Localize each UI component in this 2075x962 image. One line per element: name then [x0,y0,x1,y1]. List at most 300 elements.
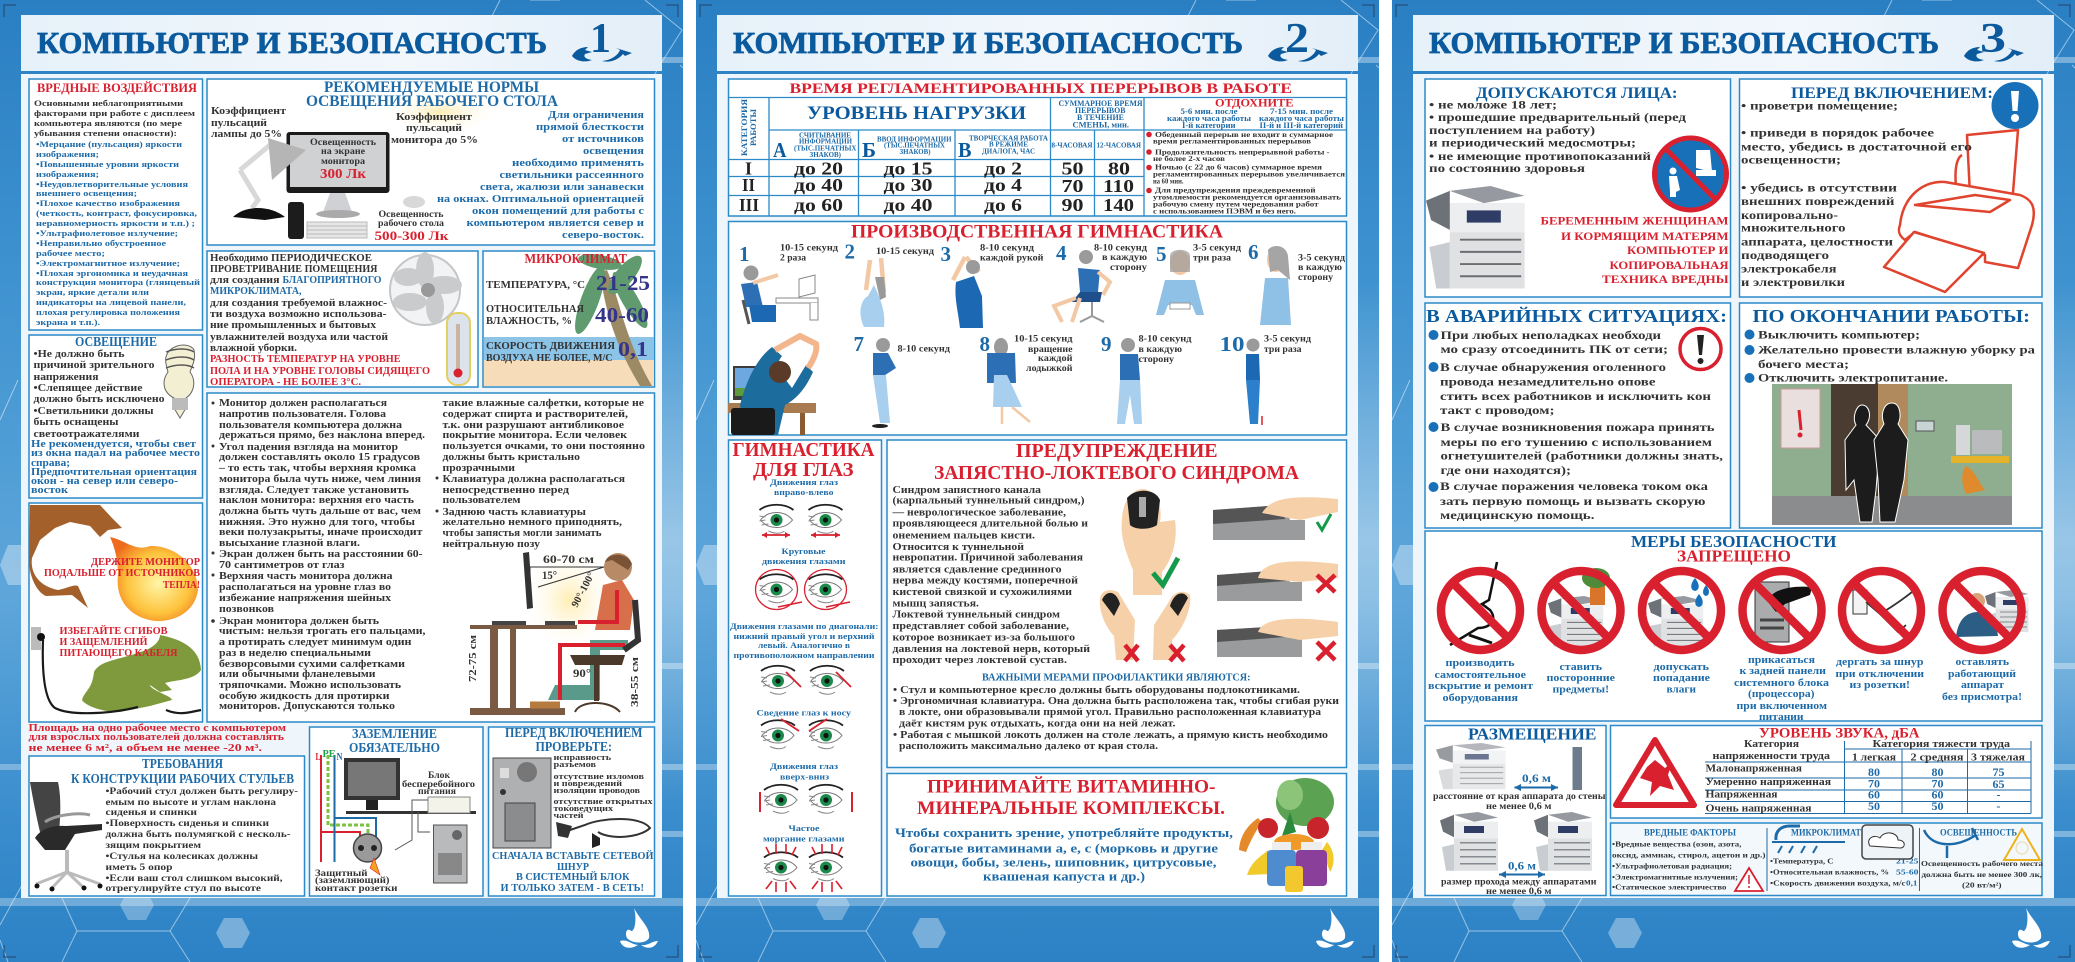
figure: woman stretching at a computer [728,336,816,435]
vitamin advice: овощи, бобы, зелень, шиповник, цитрусовые, [910,856,1216,870]
illustration: palm tree [569,251,653,386]
eye exercise captions: движения глазами [762,556,846,566]
monitor text: right column: желательно немного приподнять, [442,517,622,528]
exercise captions: 3-5 секунд [1264,334,1311,344]
exercise captions: 10-15 секунд [876,247,934,257]
checklist: исправность [554,753,612,762]
label: UPS: бесперебойного [402,779,475,790]
monitor text: left column: пользователя компьютера должна [219,420,403,431]
panel: emergencies [1425,303,1730,528]
warning: pregnant women [1540,214,1729,286]
list of factors: •Электромагнитное излучение; [36,258,180,268]
icon: red exclamation [1680,328,1721,370]
heading: check: ПРОВЕРЬТЕ: [536,740,612,755]
table rows: до 40 [794,175,843,195]
captions: prohibited actions: работающий [1948,668,2017,680]
icon: do not leave unattended [1942,571,2028,650]
microclimate values: 0,1 [618,337,648,361]
column: microclimate summary: 0,1 [1906,878,1918,888]
captions: prohibited actions: вскрытие и ремонт [1428,680,1534,692]
text: glare limitation: прямой блесткости [536,121,645,133]
heading: vitamins [917,776,1225,819]
sub-headers: load types: А [773,138,787,162]
exercise captions: каждой рукой [980,252,1044,264]
figure: exercise 8 [987,338,1030,424]
before switching on list: • приведи в порядок рабочее [1741,128,1934,140]
exercise captions: в каждую [1298,263,1342,273]
syndrome description: онемением пальцев кисти. [892,530,1035,542]
panel: end of work [1740,303,2042,528]
monitor text: left column: должен составлять около 15 градусов [219,452,420,463]
end of work actions: Выключить компьютер; [1758,330,1920,342]
exercise numbers: 5 [1156,242,1166,266]
table rows: до 6 [984,195,1022,215]
exercise captions: три раза [1264,345,1302,355]
syndrome description: проявляющееся длительной болью и [892,518,1088,530]
monitor text: left column: держаться прямо, без наклона вперед. [219,430,425,441]
labels: illumination on screen: монитора [321,157,365,167]
figure: exercise 2 [861,258,886,327]
diagram: grounding wiring [316,749,476,883]
checklist: токоведущих [554,804,613,813]
emergency actions: зать первую помощь и вызвать скорую [1440,496,1706,508]
temperature difference warning: ПОЛА И НА УРОВНЕ ГОЛОВЫ СИДЯЩЕГО [210,365,430,377]
monitor text: left column: раз в неделю специальными [219,648,371,659]
monitor text: left column: взгляда. Следует также установить [219,485,410,496]
column header: total break time: СУММАРНОЕ ВРЕМЯ [1058,99,1143,108]
emergency actions: огнетушителей (работники должны знать, [1440,450,1723,462]
labels: desk illumination [374,210,449,243]
poster 2 [696,0,1379,962]
notes with red bullets [1146,130,1345,216]
syndrome description: нерва между костями, поперечной [892,576,1078,586]
prevention measures: • Эргономичная клавиатура. Она должна быть расположена так, чтобы сгибая руки [893,696,1339,707]
captions: prohibited actions: посторонние [1546,672,1615,684]
labels: pulsation coefficients: пульсаций [211,117,268,129]
heading: chair requirements: ТРЕБОВАНИЯ [142,757,223,772]
instruction: ШНУР [557,861,589,873]
notes with red bullets: с использованием ПЭВМ и без него. [1153,206,1296,216]
warning: cable: ИЗБЕГАЙТЕ СГИБОВ [60,625,168,637]
icon row: eyes diagonal [761,666,851,694]
chair rules: емым по высоте и углам наклона [106,798,276,808]
column: illumination summary: (20 вт/м²) [1962,880,2002,890]
sub-headers: load types: СЧИТЫВАНИЕ [799,130,851,140]
list of factors: •Неправильно обустроенное [36,238,166,248]
table rows: 80 [1108,158,1130,178]
lighting recommendation: Предпочтительная ориентация [31,467,198,478]
text: glare limitation: светильники рассеянного [500,169,645,181]
column: microclimate summary: 55-60 [1896,868,1919,876]
illustration: leaving the office [1772,384,2012,525]
illustration: correct keyboard position [1213,497,1338,540]
text: area requirement: для взрослых пользователей должна составлять [28,732,284,743]
monitor text: left column: а протирать следует минимум один [219,637,412,648]
table rows: до 40 [884,195,932,215]
table: sound levels: напряженности труда [1712,751,1831,762]
before switching on list: и электровилки [1741,277,1845,289]
microclimate values: 21-25 [596,271,650,295]
sub-headers: load types: ДИАЛОГА, ЧАС [982,146,1035,156]
exercise numbers: 7 [854,332,864,356]
monitor text: left column: избежание напряжения шейных [219,593,392,604]
ventilation text: ПРОВЕТРИВАНИЕ ПОМЕЩЕНИЯ [210,263,378,275]
icon: no self repair [1441,562,1520,650]
checklist: отсутствие изломов [554,772,645,781]
heading: carpal tunnel: ЗАПЯСТНО-ЛОКТЕВОГО СИНДРОМА [934,463,1299,484]
table: sound levels: Очень напряженная [1706,804,1812,814]
figure: exercise 10 [1246,338,1262,425]
monitor text: right column [442,398,645,550]
heading: before switching on: ПЕРЕД ВКЛЮЧЕНИЕМ: [1791,85,1993,102]
diagram: grounding wiring: PE [322,749,336,760]
microclimate parameters: ВОЗДУХА НЕ БОЛЕЕ, М/С [486,352,613,364]
poster 3 background and header [1392,0,2075,962]
heading: vitamins: ПРИНИМАЙТЕ ВИТАМИННО- [927,776,1216,798]
checklist: отсутствие открытых [554,797,652,806]
panel: harmful effects [29,79,202,330]
warning: pregnant women: И КОРМЯЩИМ МАТЕРЯМ [1561,229,1728,243]
list of factors: внешнего освещения; [36,188,137,198]
column: microclimate summary: 21-25 [1896,856,1919,866]
heading: chair requirements [71,757,294,787]
panel: ventilation [207,251,478,388]
poster 3 number badge: 3 [1980,16,2006,62]
heading: sound level: УРОВЕНЬ ЗВУКА, дБА [1759,726,1920,742]
illustration: copier [1426,186,1525,288]
sub-headers: load types: 12-ЧАСОВАЯ [1096,140,1142,150]
end of work bullets [1744,330,1754,383]
panel: lighting [29,335,202,498]
column: microclimate summary: МИКРОКЛИМАТ [1791,828,1861,838]
monitor text: left column: напротив пользователя. Голова [219,409,387,420]
monitor text: left column: или обычными фланелевыми [219,669,376,680]
label: protective contact: (заземляющий) [315,875,390,886]
poster 3 [1392,0,2075,962]
sub-headers: load types [773,130,1142,162]
syndrome description: давления на локтевой нерв, который [892,644,1090,655]
icon row: eyes left-right [760,505,842,538]
illustration: copier near wall [1436,743,1506,789]
ventilation text: для создания [210,274,280,286]
syndrome description: Относится к туннельной [892,542,1024,553]
monitor text: left column: нижняя. Это нужно для того, чтобы [219,517,415,528]
allowed persons list: по состоянию здоровья [1429,163,1585,175]
instruction: В СИСТЕМНЫЙ БЛОК [516,871,630,883]
column: harmful factors: ВРЕДНЫЕ ФАКТОРЫ [1644,828,1736,838]
text: area requirement: Площадь на одно рабочее место с компьютером [28,723,286,734]
allowed persons list: поступлением на работу) [1429,125,1595,137]
monitor text: right column: пользуется очками, то они постоянно [442,441,645,452]
table: sound levels: 60 [1868,788,1880,802]
eye exercise captions [730,477,879,844]
captions: prohibited actions: предметы! [1552,684,1609,696]
illustration: ergonomic posture: 72-75 см [468,635,479,682]
emergency actions: В случае поражения человека током ока [1440,481,1708,493]
heading: carpal tunnel: ПРЕДУПРЕЖДЕНИЕ [1016,441,1218,462]
instruction [492,850,654,894]
column: microclimate summary: •Скорость движения воздуха, м/с [1770,878,1906,888]
column header: rest: 5-6 мин. после [1180,107,1238,116]
lighting rules [34,349,164,440]
before switching on list: • убедись в отсутствии [1741,182,1897,194]
column header: category: КАТЕГОРИЯ [739,99,749,156]
monitor text: left column: располагаться на уровне глаз во [219,582,391,593]
panel: before switching on check [488,726,654,896]
temperature difference warning [210,353,430,388]
icon: do not touch back panel [1742,571,1822,650]
table rows: до 20 [794,158,843,178]
allowed persons list: • не имеющие противопоказаний [1429,151,1651,163]
table: sound levels: Категория тяжести труда [1872,739,2011,750]
column: harmful factors: оксид, аммиак, стирол, ацетон и др.) [1612,850,1766,860]
label: UPS: питания [418,787,456,797]
illustration: wrong keyboard position 1 [1217,561,1338,601]
chair rules: зящим покрытием [106,841,202,851]
monitor text: left column: наклон монитора: верхняя его часть [219,495,414,506]
poster 1 [0,0,683,962]
ventilation text: увлажнителей воздуха или частой [210,331,389,343]
allowed persons list: • прошедшие предварительный (перед [1429,112,1686,124]
ventilation text: МИКРОКЛИМАТА, [210,285,302,297]
chair rules: иметь 5 опор [106,863,172,873]
labels: illumination on screen: 300 Лк [320,167,367,182]
sub-headers: load types: В РЕЖИМЕ [989,140,1028,148]
sub-headers: load types: ТВОРЧЕСКАЯ РАБОТА [969,134,1049,142]
ventilation text: Необходимо ПЕРИОДИЧЕСКОЕ [210,252,372,264]
monitor text: left column: 70 сантиметров от глаз [219,560,344,571]
notes with red bullets: не более 2-х часов [1153,154,1225,163]
table rows: 90 [1062,195,1084,215]
before switching on list: множительного [1741,222,1846,234]
list of factors: (четкость, контраст, фокусировка, [36,208,197,218]
column: microclimate summary: •Относительная влажность, % [1770,868,1889,876]
lighting rules: •Слепящее действие [34,383,143,394]
column header: rest: 7-15 мин. после [1270,107,1334,116]
heading: eye gymnastics [732,440,874,481]
poster 1 background and header [0,0,683,962]
table rows: III [739,195,759,215]
before switching on list: аппарата, целостности [1741,236,1893,248]
prevention measures: даёт кистям рук отдыхать, когда они на ней лежат. [899,718,1176,730]
exercise captions: 8-10 секунд [980,244,1034,254]
monitor text: right column: чтобы запястья могли занимать [442,528,602,539]
labels: illumination on screen: на экране [321,147,365,157]
eye exercise captions: нижний правый угол и верхний [734,631,875,641]
panel: eye gymnastics [728,440,882,896]
icon: fan [390,252,462,325]
captions: prohibited actions: без присмотра! [1942,691,2022,703]
warning: pregnant women: КОПИРОВАЛЬНАЯ [1610,258,1729,272]
exercise captions: 8-10 секунд [1094,244,1147,254]
monitor text: right column: прозрачными [442,463,515,474]
icon: prohibited for pregnant women [1654,138,1726,210]
panel: microclimate [483,251,654,387]
monitor text: left column [218,398,426,712]
emergency actions: меры по его тушению с использованием [1440,437,1712,449]
illustration: wrong keyboard position 2 [1217,619,1338,660]
syndrome description: которое возникает из-за большого [892,632,1075,644]
heading: harmful effects: ВРЕДНЫЕ ВОЗДЕЙСТВИЯ [37,80,198,95]
monitor text: left column: Экран монитора должен быть [219,616,379,627]
heading: microclimate: МИКРОКЛИМАТ [524,251,627,266]
icon: blue exclamation [1992,82,2038,129]
column header: total break time [1058,99,1143,130]
column header: rest: каждого часа работы [1167,114,1252,123]
panel: who is allowed [1425,79,1730,297]
exercise captions: 8-10 секунд [1138,334,1192,344]
eye exercise captions: Частое [788,823,820,833]
labels: pulsation coefficients: монитора до 5% [391,134,478,146]
intro text: Основными неблагоприятными [34,98,183,108]
temperature difference warning: ОПЕРАТОРА - НЕ БОЛЕЕ 3°С. [210,376,361,388]
sub-headers: load types: 8-ЧАСОВАЯ [1052,140,1093,150]
exercise numbers: 1 [739,242,750,266]
column header: total break time: В ТЕЧЕНИЕ [1077,113,1124,122]
icon: no liquids [1642,571,1721,650]
labels: pulsation coefficients: пульсаций [406,122,463,134]
heading: lighting norms [306,79,558,110]
list of factors: •Ультрафиолетовое излучение; [36,228,178,238]
caption: passage width: размер прохода между аппаратами [1441,878,1597,888]
emergency actions: где они находятся); [1440,465,1571,477]
table rows: 110 [1103,176,1134,196]
table rows: II [742,175,755,195]
illustration: wrong hand positions [1100,590,1190,661]
vitamin advice: Чтобы сохранить зрение, употребляйте продукты, [895,826,1233,840]
caption: passage width [1441,878,1597,897]
lighting recommendation: из окна падал на рабочее место [31,448,200,459]
syndrome description: Локтевой туннельный синдром [892,610,1060,620]
label: protective contact: Защитный [315,868,368,879]
captions: prohibited actions: системного блока [1734,677,1830,689]
captions: prohibited actions: при включенном [1736,700,1828,712]
labels: pulsation coefficients [211,105,478,146]
microclimate parameters: ОТНОСИТЕЛЬНАЯ [486,303,584,315]
emergency actions: В случае обнаружения оголенного [1440,362,1666,374]
syndrome description: кистевой связкой и сухожилиями [892,587,1072,598]
checklist: изоляции проводов [554,786,641,795]
poster 2 number badge: 2 [1285,16,1309,62]
microclimate parameters: СКОРОСТЬ ДВИЖЕНИЯ [486,340,615,352]
figure: exercise 6 [1260,246,1291,325]
end of work actions: Отключить электропитание. [1758,372,1948,384]
monitor text: left column: позвонков [219,604,274,615]
list of factors: экрана и т.п.). [36,317,100,327]
eye exercise captions: Движения глазами по диагонали: [730,621,879,631]
monitor text: left column: Верхняя часть монитора должна [219,571,393,582]
heading: carpal tunnel [934,441,1299,484]
column: illumination summary [1921,828,2043,890]
notes with red bullets: регламентированных перерывов увеличивается [1153,170,1345,178]
emergency actions: медицинскую помощь. [1440,510,1595,522]
exercise numbers: 2 [844,240,855,264]
list of factors: изображения; [36,169,99,179]
warning: cable [60,625,178,659]
column: illumination summary: Освещенность рабочего места [1921,859,2043,868]
heading: lighting norms: РЕКОМЕНДУЕМЫЕ НОРМЫ [324,79,539,96]
table rows: 140 [1103,195,1134,215]
list of factors: экран, яркие детали или [36,287,149,297]
table rows: 70 [1062,176,1084,196]
before switching on list: • проветри помещение; [1741,100,1898,112]
exercise captions: сторону [1138,355,1174,365]
text: glare limitation: необходимо применять [512,157,644,169]
panel: chair requirements [29,756,304,896]
icon: do not pull cord [1842,571,1921,650]
panel: sound level [1610,726,2042,818]
eye exercise captions: вправо-влево [774,487,834,497]
chair rules: сиденья и спинки [106,808,198,818]
icon: no foreign objects [1542,568,1620,650]
illustration: monitor with lamp [233,132,425,239]
monitor text: left column: Угол падения взгляда на монитор [219,442,398,453]
column header: category: РАБОТЫ [748,108,758,146]
before switching on list: подводящего [1741,250,1829,262]
text: glare limitation: освещения [583,145,644,157]
list of factors: неравномерность яркости и т.п.) ; [36,218,195,228]
icon row: eyes circular [756,570,850,610]
monitor text: right column: непосредственно перед [442,485,570,496]
table rows: до 2 [984,158,1022,178]
chair rules: •Поверхность сиденья и спинки [106,819,270,829]
heading: gymnastics: ПРОИЗВОДСТВЕННАЯ ГИМНАСТИКА [851,222,1223,242]
emergency actions: При любых неполадках необходи [1440,330,1661,342]
illustration: system unit [493,758,551,848]
warning: heat: ТЕПЛА! [163,580,200,591]
illustration: power cord [556,819,650,848]
table: sound levels: 70 [1932,776,1944,790]
captions: prohibited actions: допускать [1654,661,1709,673]
icon row: blinking eyes [764,844,843,892]
exercise captions: 10-15 секунд [1014,334,1073,344]
table: sound levels: Малонапряженная [1706,764,1802,774]
emergency actions: стить всех работников и исключить кон [1440,391,1711,403]
syndrome description: (карпальный туннельный синдром,) [892,496,1085,506]
monitor text: right column: должны быть кристально [442,452,580,463]
checklist: разъемов [554,760,597,769]
lighting recommendation: справа; [31,458,70,469]
lighting rules: должно быть исключено [34,394,164,405]
checklist: частей [554,811,584,820]
emergency actions [1440,330,1723,522]
monitor text: left column: монитора была чуть ниже, чем линия [219,474,421,485]
poster 2 background and header [696,0,1379,962]
panel: monitor placement [207,393,654,722]
captions: prohibited actions: (процессора) [1748,688,1815,700]
exercise captions: 2 раза [780,254,806,264]
chair rules [106,786,298,894]
sub-headers: load types: ЗНАКОВ) [810,150,841,159]
icon: yellow triangle [2004,829,2040,860]
column: harmful factors: •Электромагнитные излучения; [1612,872,1738,882]
table rows [739,158,1134,215]
sub-headers: load types: ИНФОРМАЦИИ [799,136,852,146]
notes with red bullets: Ночью (с 22 до 6 часов) суммарное время [1155,162,1322,172]
table rows: I [745,158,752,178]
heading: check: ПЕРЕД ВКЛЮЧЕНИЕМ [505,726,642,741]
table rows: до 15 [884,158,932,178]
exercise captions: три раза [1193,254,1231,264]
exercise captions: 3-5 секунд [1193,244,1241,254]
exercise numbers [739,240,1258,356]
dimension: passage width [1499,860,1545,878]
captions: prohibited actions: дергать за шнур [1836,656,1924,668]
dimension: passage width: 0,6 м [1508,860,1536,872]
figure: exercise 4 [1054,250,1110,322]
monitor text: left column: – то есть так, чтобы верхняя кромка [218,463,417,474]
syndrome description: невропатии. Причиной заболевания [892,552,1083,564]
